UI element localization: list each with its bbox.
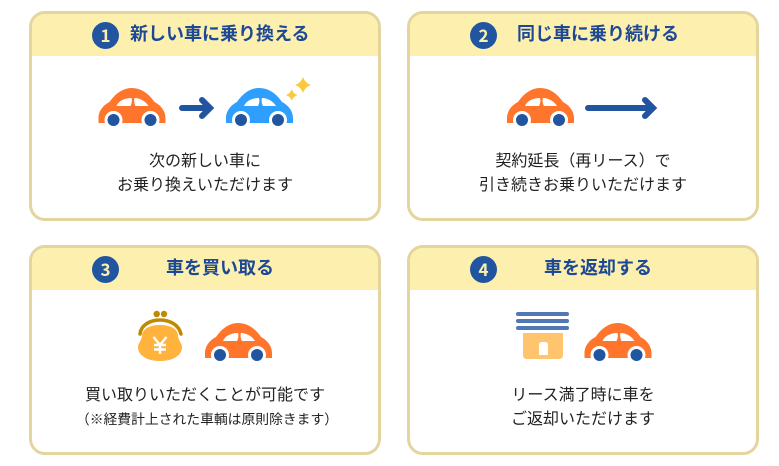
text: panel 1 [117,152,293,194]
text: panel 4 [511,386,655,428]
heading 1: 新しい車に乗り換える [130,24,309,44]
text: panel 4: ご返却いただけます [511,411,655,428]
icon: garage [516,312,569,359]
text: panel 2: 引き続きお乗りいただけます [479,177,687,194]
number badge 1: 1 [100,22,111,47]
text: panel 1: 次の新しい車に [149,153,261,170]
header: 2 [410,14,756,56]
header: 3 [32,248,378,290]
icon: orange car panel 2 [507,88,574,129]
icon: orange car panel 1 [98,88,166,129]
panel: 1 new car [29,11,381,221]
icon: orange car panel 3 [205,323,272,364]
number badge 2: 2 [478,22,489,47]
text: panel 3: （※経費計上された車輌は原則除きます） [76,412,338,427]
number badge 3 [92,256,119,283]
text: panel 4: リース満了時に車を [511,387,655,404]
header: 1 [32,14,378,56]
text: panel 3: 買い取りいただくことが可能です [85,387,325,404]
header: 4 [410,248,756,290]
icon: sparkles [286,77,311,101]
number badge 4 [470,256,497,283]
text: panel 2 [479,152,687,194]
arrow: panel 2 [588,100,653,116]
number badge 4: 4 [478,256,489,281]
heading 4: 車を返却する [544,258,652,278]
text: panel 2: 契約延長（再リース）で [495,153,671,170]
text: panel 1: お乗り換えいただけます [117,177,293,194]
icon: coin purse with yen [138,311,182,361]
arrow: panel 1 [182,100,210,116]
panel: 4 return [407,245,759,455]
panel: 2 same car [407,11,759,221]
heading 2: 同じ車に乗り続ける [517,24,679,44]
heading 3: 車を買い取る [166,258,274,278]
panel: 3 buy out [29,245,381,455]
number badge 3: 3 [100,256,111,281]
number badge 2 [470,22,497,49]
text: panel 3 [76,386,338,427]
icon: orange car panel 4 [584,323,652,364]
number badge 1 [92,22,119,49]
icon: blue car [226,88,293,129]
